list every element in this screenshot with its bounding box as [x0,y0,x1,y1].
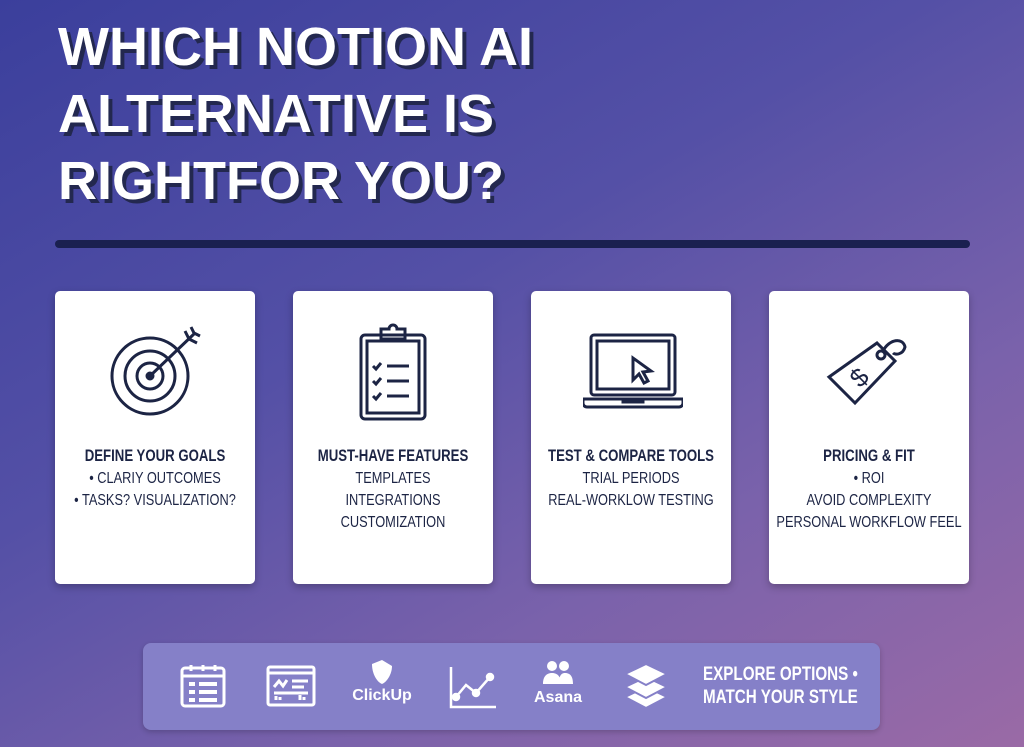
text: MUST-HAVE FEATURES [318,447,468,465]
bottom bar [143,643,880,730]
icon: calendar list [180,665,226,708]
icon: line chart [450,667,496,708]
text: PRICING & FIT [823,447,915,465]
text [74,447,236,509]
text [318,447,468,531]
text: DEFINE YOUR GOALS [85,447,225,465]
label: EXPLORE OPTIONS • [703,664,858,685]
text: • CLARIY OUTCOMES [89,470,221,487]
icon: Asana [534,661,582,706]
label [703,664,858,708]
text: CUSTOMIZATION [341,514,445,531]
icon: clipboard [360,324,426,420]
icon: Asana: Asana [534,689,582,706]
text: PERSONAL WORKFLOW FEEL [776,514,962,531]
icon: price tag [826,339,906,406]
title: WHICH NOTION AI [58,17,533,77]
icon: ClickUp [352,660,412,704]
text: TEMPLATES [355,470,431,487]
title: ALTERNATIVE IS [58,84,494,144]
text: • ROI [854,470,884,487]
title [58,17,534,211]
label: MATCH YOUR STYLE [703,687,858,708]
text: AVOID COMPLEXITY [807,492,931,509]
card: goals [55,291,255,584]
card: test [531,291,731,584]
icon: dashboard [266,666,316,706]
card: features [293,291,493,584]
text [776,447,962,531]
icon: laptop [583,334,683,408]
card: pricing [769,291,969,584]
title: RIGHTFOR YOU? [58,151,504,211]
text: • TASKS? VISUALIZATION? [74,492,236,509]
icon: ClickUp: ClickUp [352,687,412,704]
text: REAL-WORKLOW TESTING [548,492,714,509]
text: TEST & COMPARE TOOLS [548,447,714,465]
icon: price tag: $ [843,361,875,393]
text: TRIAL PERIODS [583,470,679,487]
icon: layers [627,665,665,707]
text: INTEGRATIONS [345,492,441,509]
icon: target [110,326,201,416]
text [548,447,714,509]
